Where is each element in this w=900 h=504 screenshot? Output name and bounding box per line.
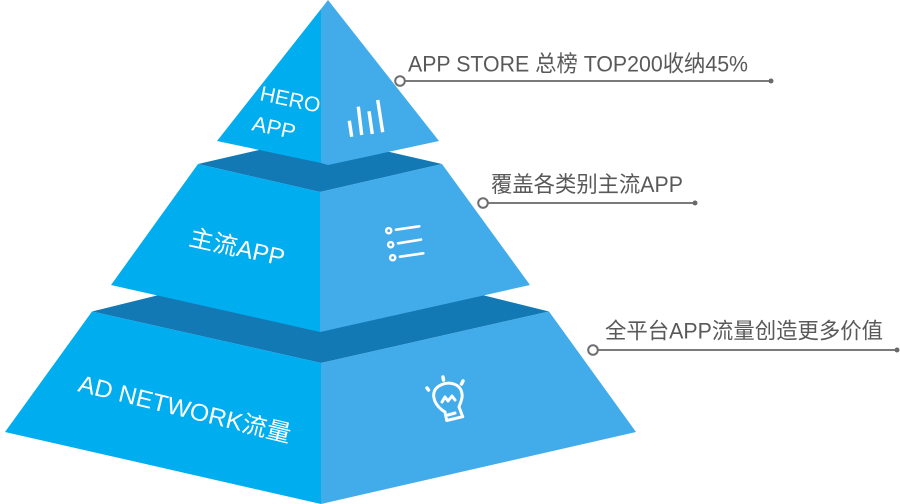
label: 主流APP: 主流APP (187, 224, 287, 272)
ring marker (588, 345, 598, 355)
left face of middle tier (111, 164, 320, 332)
end dot (894, 348, 900, 352)
label: APP: APP (250, 112, 298, 144)
left face of top tier (217, 9, 321, 163)
left face of bottom tier (5, 312, 321, 504)
label: AD NETWORK流量: AD NETWORK流量 (76, 371, 294, 448)
right face of middle tier (320, 164, 530, 332)
top surface of middle tier (198, 136, 442, 192)
callout: middle tier (478, 172, 698, 208)
right face of bottom tier (321, 312, 636, 504)
label: HERO: HERO (258, 82, 322, 118)
leader line (404, 80, 771, 82)
right face of top tier (321, 0, 439, 165)
top surface of bottom tier (92, 255, 549, 363)
tier: top, HERO APP (217, 0, 439, 165)
icon: bar chart (349, 100, 383, 137)
leader line (487, 202, 695, 204)
leader line (597, 349, 897, 351)
end dot (692, 200, 698, 206)
tier: middle, 主流APP (111, 136, 530, 332)
icon: light bulb (427, 377, 463, 420)
callout text: APP STORE 总榜 TOP200收纳45% (408, 52, 748, 76)
end dot (768, 78, 774, 84)
icon: list (386, 226, 423, 260)
callout: top tier (395, 52, 774, 86)
ring marker (395, 76, 405, 86)
tier: bottom, AD NETWORK (5, 255, 636, 504)
callout text: 全平台APP流量创造更多价值 (605, 318, 883, 344)
callout: bottom tier (588, 318, 900, 355)
callout text: 覆盖各类别主流APP (491, 172, 683, 197)
ring marker (478, 198, 488, 208)
